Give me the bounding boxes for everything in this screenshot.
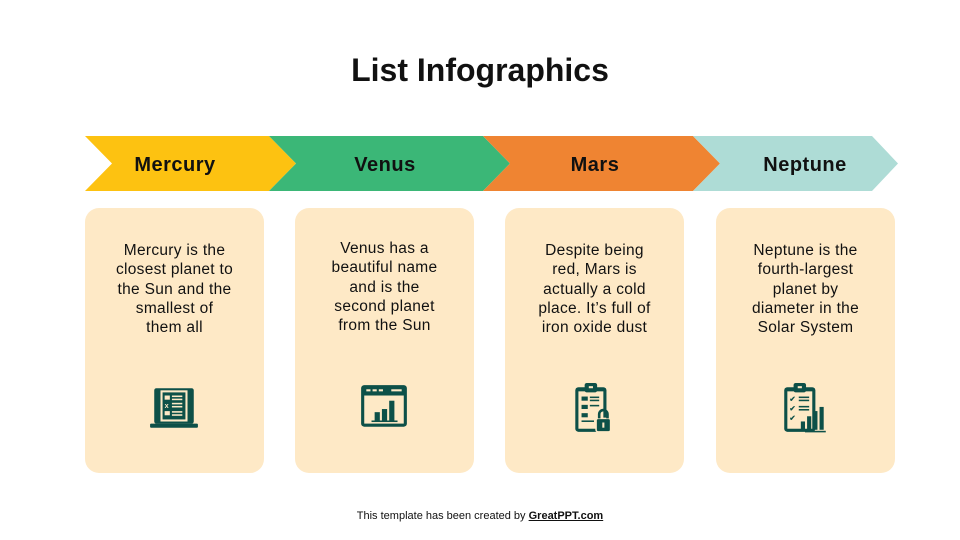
text: Mars: iron oxide dust: [542, 319, 647, 336]
text: Mars: place. It’s full of: [538, 300, 651, 317]
text: Mercury: Mercury is the: [124, 242, 225, 259]
text: Neptune: diameter in the: [752, 300, 859, 317]
text: Mars: [538, 242, 651, 336]
text: Venus: and is the: [349, 279, 420, 296]
text: Mercury: closest planet to: [116, 261, 233, 278]
chevron: Mercury: Mercury: [134, 154, 216, 176]
icon: clipboard chart: ✔: [789, 404, 796, 413]
text: Neptune: fourth-largest: [758, 261, 853, 278]
icon: laptop list: x: [165, 401, 169, 410]
chevron: Mars: Mars: [571, 154, 619, 176]
chevron: Mars: [483, 136, 720, 191]
text: Mercury: smallest of: [136, 300, 213, 317]
text: Venus: second planet: [334, 298, 435, 315]
icon: browser chart: [361, 385, 407, 427]
text: Neptune: Solar System: [758, 319, 853, 336]
panel: Neptune: [716, 208, 895, 473]
icon: clipboard lock: [575, 383, 610, 432]
text: Venus: from the Sun: [338, 317, 431, 334]
icon: laptop list: [150, 388, 198, 428]
chevron: Neptune: [693, 136, 898, 191]
text: Venus: beautiful name: [332, 259, 437, 276]
text: Mercury: the Sun and the: [118, 281, 231, 298]
panel: Venus: [295, 208, 474, 473]
text: Mercury: [116, 242, 233, 336]
text: Mercury: them all: [146, 319, 203, 336]
chevron: Venus: Venus: [354, 154, 416, 176]
chevron banner: [85, 136, 898, 191]
icon: clipboard chart: ✔: [789, 413, 796, 422]
text: Neptune: planet by: [773, 281, 838, 298]
text: Venus: Venus has a: [340, 240, 429, 257]
icon: clipboard chart: [784, 383, 826, 432]
title: List Infographics: [351, 52, 609, 88]
panel: Mercury: [85, 208, 264, 473]
icon: clipboard chart: ✔: [789, 395, 796, 404]
text: Mars: Despite being: [545, 242, 644, 259]
chevron: Venus: [269, 136, 510, 191]
text: Mars: actually a cold: [543, 281, 646, 298]
footer: This template has been created by GreatPPT.com: [357, 510, 603, 522]
text: Mars: red, Mars is: [552, 261, 637, 278]
panel: Mars: [505, 208, 684, 473]
text: Venus: [332, 240, 437, 334]
chevron: Neptune: Neptune: [763, 154, 847, 176]
text: Neptune: [752, 242, 859, 336]
text: Neptune: Neptune is the: [753, 242, 858, 259]
chevron: Mercury: [85, 136, 296, 191]
